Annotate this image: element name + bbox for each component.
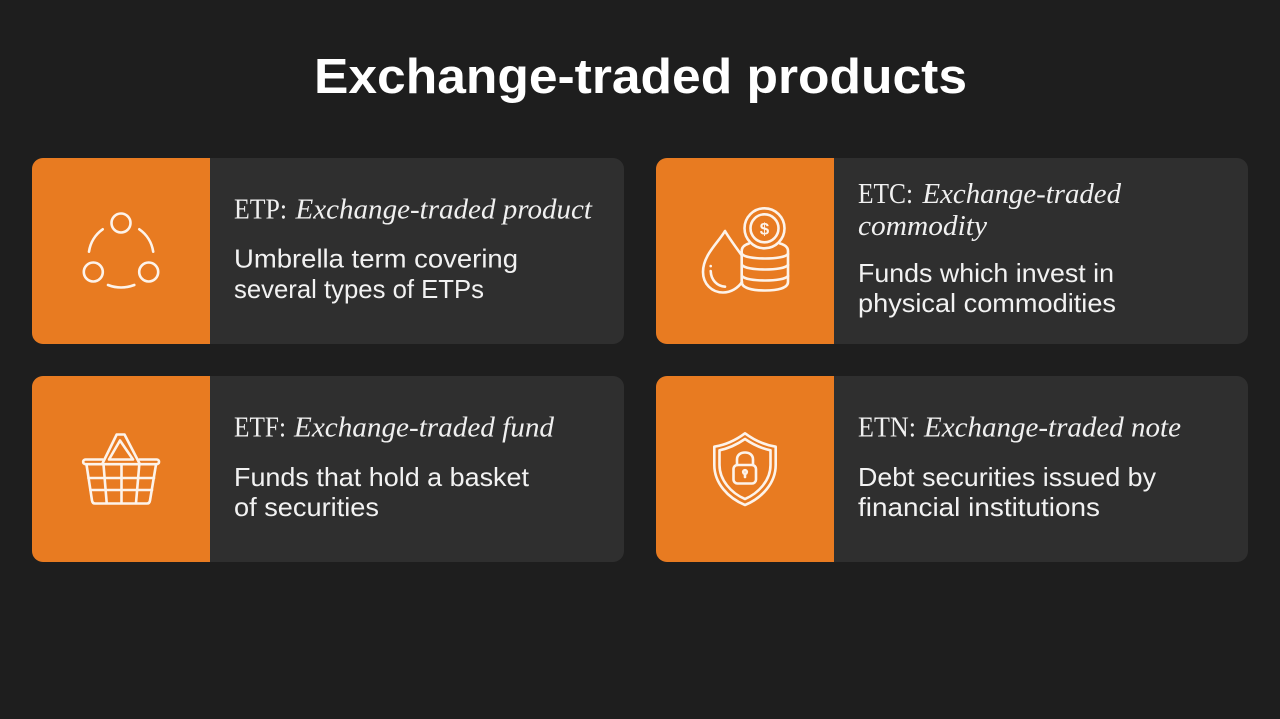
- description: ETC: Funds which invest in: [858, 258, 1114, 288]
- panel: ETF: [32, 376, 624, 562]
- icon: dollar sign: $: [760, 220, 770, 238]
- heading: ETN: Exchange-traded note: [923, 412, 1181, 444]
- description: ETC: [858, 258, 1116, 318]
- icon: three connected circles: [84, 214, 158, 288]
- heading: ETF: Exchange-traded fund: [293, 412, 555, 444]
- heading: ETN: ETN:: [858, 412, 916, 444]
- icon: oil drop and coins: [703, 208, 788, 292]
- panel: ETC: [656, 158, 1248, 344]
- heading: ETC: Exchange-traded: [921, 179, 1122, 210]
- icon: shield with padlock: [714, 433, 776, 505]
- description: ETN: financial institutions: [858, 492, 1100, 522]
- heading: ETC: ETC:: [858, 179, 913, 210]
- description: ETP: Umbrella term covering: [234, 244, 518, 274]
- panel: ETP: [32, 158, 624, 344]
- heading: ETP: Exchange-traded product: [294, 194, 593, 226]
- heading: ETC: commodity: [858, 211, 988, 242]
- heading: ETF: ETF:: [234, 412, 286, 444]
- icon: basket: [83, 434, 159, 504]
- description: ETN: Debt securities issued by: [858, 462, 1156, 492]
- heading: ETP: ETP:: [234, 194, 287, 226]
- description: ETC: physical commodities: [858, 288, 1116, 318]
- description: ETP: [234, 244, 518, 304]
- title: Exchange-traded products: [314, 49, 967, 104]
- description: ETF: [234, 462, 530, 522]
- description: ETF: Funds that hold a basket: [234, 462, 530, 492]
- description: ETP: several types of ETPs: [234, 274, 484, 304]
- description: ETF: of securities: [234, 492, 379, 522]
- description: ETN: [858, 462, 1156, 522]
- heading: ETC: [858, 179, 1122, 242]
- panel: ETN: [656, 376, 1248, 562]
